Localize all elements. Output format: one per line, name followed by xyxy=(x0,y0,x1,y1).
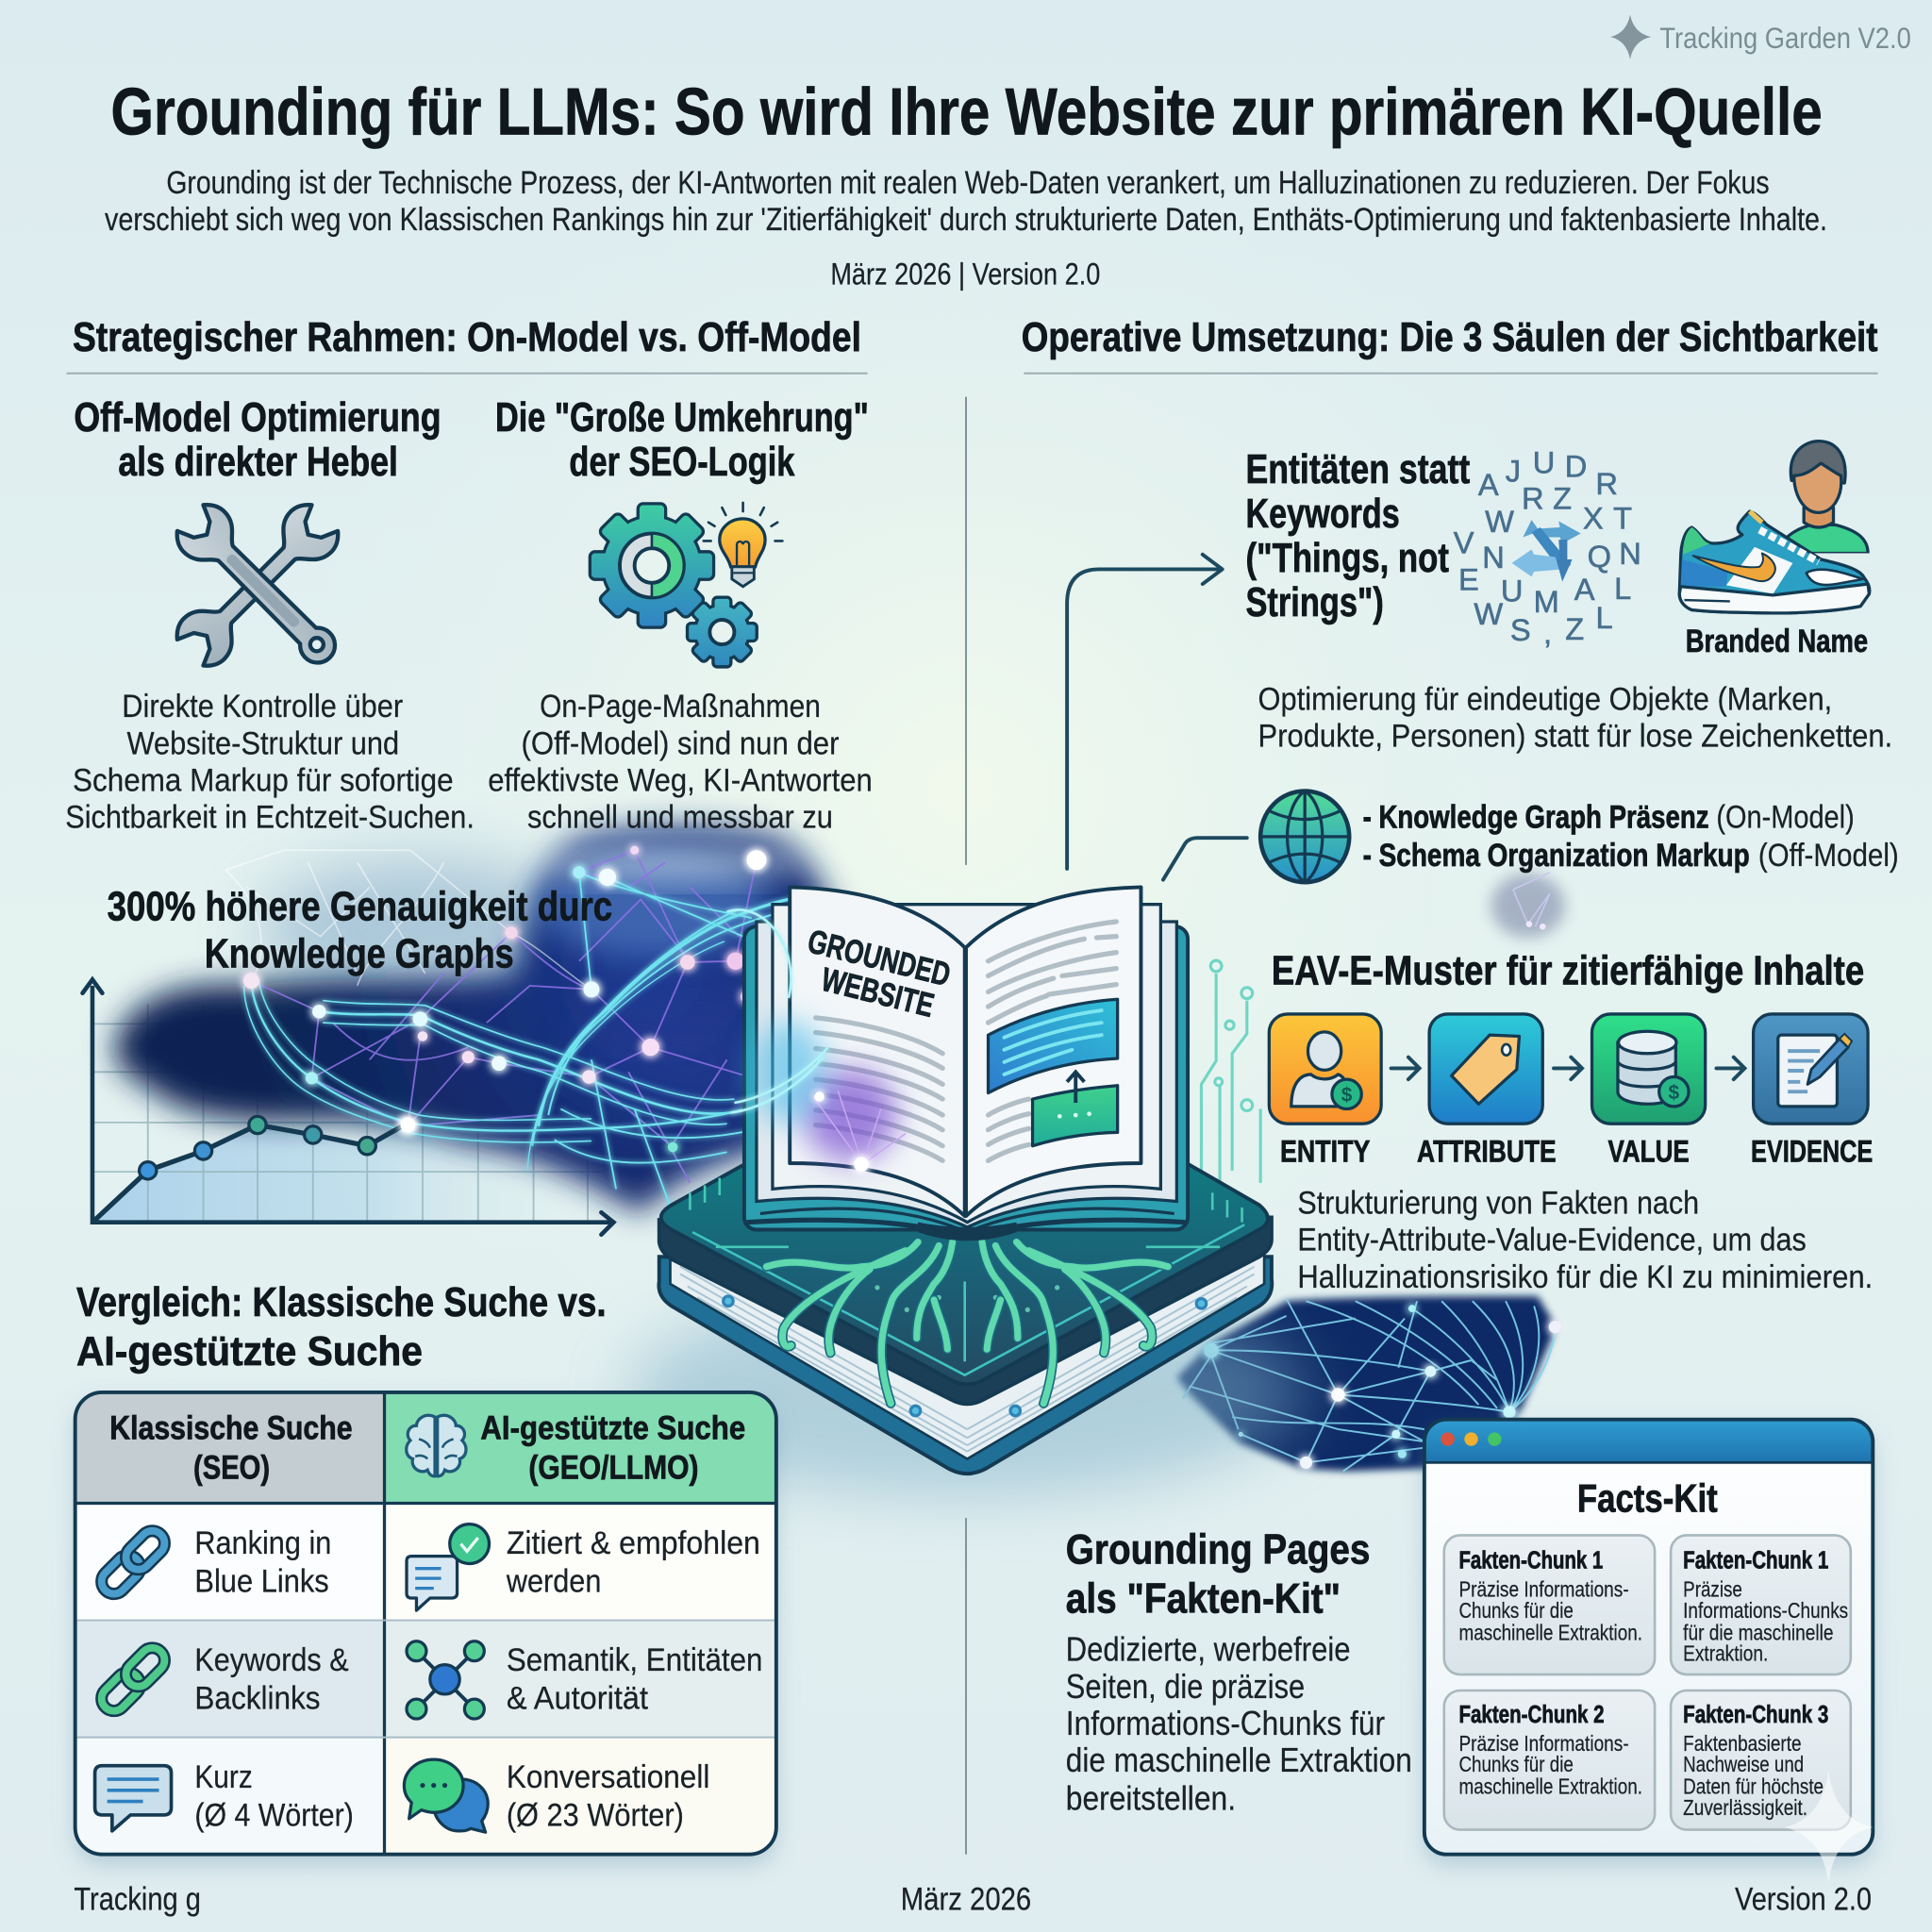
icon: letter cloud with arrows: L xyxy=(1614,571,1631,606)
header: classic search: (SEO) xyxy=(193,1449,270,1486)
footer: März 2026 xyxy=(901,1881,1031,1917)
card: fact chunk 1 variant: Extraktion. xyxy=(1683,1641,1768,1666)
watermark: Tracking Garden xyxy=(1610,15,1911,59)
icon: letter cloud with arrows: X xyxy=(1583,500,1604,535)
icon: letter cloud with arrows: R xyxy=(1522,480,1544,515)
heading: off-model: Off-Model Optimierung xyxy=(74,395,441,441)
panel: grounding pages xyxy=(1066,1526,1412,1818)
heading: 300 percent accuracy: 300% höhere Genauigkeit durc xyxy=(108,885,612,930)
date and version line: März 2026 | Version 2.0 xyxy=(830,257,1100,291)
heading: entities xyxy=(1245,447,1470,625)
arrow xyxy=(1716,1058,1744,1079)
labels: EAV-E steps: EVIDENCE xyxy=(1751,1134,1873,1169)
icon: letter cloud with arrows xyxy=(1454,445,1641,650)
card: fact chunk 1: Chunks für die xyxy=(1458,1598,1574,1623)
icon: person and branded sneaker xyxy=(1679,441,1871,613)
row: semantics: Semantik, Entitäten xyxy=(507,1642,762,1678)
body: direct control: Sichtbarkeit in Echtzeit-Suchen. xyxy=(65,800,475,836)
heading: comparison: AI-gestützte Suche xyxy=(76,1329,423,1374)
book: right page xyxy=(966,887,1141,1216)
icon: message with check xyxy=(407,1524,490,1610)
body: structuring facts xyxy=(1297,1186,1873,1295)
row: cited and recommended xyxy=(506,1525,760,1600)
icon: letter cloud with arrows: W xyxy=(1485,504,1514,539)
footer xyxy=(74,1881,1872,1917)
heading: grounding pages: Grounding Pages xyxy=(1066,1526,1370,1573)
card: fact chunk 3: Daten für höchste xyxy=(1683,1774,1824,1799)
book: right page text lines xyxy=(989,922,1116,1160)
knowledge graph and schema bullets: - Schema Organization Markup xyxy=(1363,838,1750,874)
icon: letter cloud with arrows: R xyxy=(1595,466,1618,501)
body: direct control: Schema Markup für sofortige xyxy=(73,763,454,799)
icon: letter cloud with arrows: N xyxy=(1482,540,1505,575)
circuit traces beside the book xyxy=(1201,960,1260,1183)
card: fact chunk 1 variant: für die maschinelle xyxy=(1683,1620,1834,1644)
body: dedicated pages: bereitstellen. xyxy=(1066,1779,1236,1818)
spine base xyxy=(918,1223,1017,1241)
body: structuring facts: Entity-Attribute-Value-Evidence, um das xyxy=(1297,1223,1807,1258)
icon: letter cloud with arrows: Q xyxy=(1588,539,1611,574)
body: on-page measures: (Off-Model) sind nun der xyxy=(521,725,839,761)
card: fact chunk 2: maschinelle Extraktion. xyxy=(1458,1774,1642,1799)
header: classic search xyxy=(109,1410,353,1486)
arrow xyxy=(1391,1058,1420,1079)
neural network: glowing nodes xyxy=(243,846,769,1152)
row: cited and recommended: werden xyxy=(506,1564,601,1600)
book: blue highlight box xyxy=(989,999,1118,1093)
roots growing into the platform xyxy=(766,1242,1168,1404)
book label: grounded website xyxy=(804,923,954,1024)
body: dedicated pages xyxy=(1066,1630,1412,1818)
icon: letter cloud with arrows: A xyxy=(1478,467,1499,502)
neural network: pale upper strands xyxy=(225,850,591,990)
arrow xyxy=(1554,1058,1582,1079)
tile: evidence xyxy=(1754,1014,1868,1124)
icon: crossed wrenches xyxy=(170,498,350,677)
icon: letter cloud with arrows: T xyxy=(1613,500,1632,535)
card: fact chunk 3: Faktenbasierte xyxy=(1683,1731,1802,1756)
tile: entity xyxy=(1269,1014,1381,1124)
body: unique objects xyxy=(1258,681,1892,755)
sneaker xyxy=(1679,511,1870,613)
body: dedicated pages: Dedizierte, werbefreie xyxy=(1066,1630,1351,1669)
heading: big reversal xyxy=(495,395,869,485)
footer: Tracking g xyxy=(74,1881,201,1917)
icon: letter cloud with arrows: J xyxy=(1506,454,1521,489)
neural network: cyan bundles xyxy=(244,873,813,1214)
tile: value xyxy=(1592,1014,1706,1124)
body: structuring facts: Halluzinationsrisiko für die KI zu minimieren. xyxy=(1297,1259,1873,1295)
comparison table xyxy=(75,1392,776,1855)
heading: off-model: als direkter Hebel xyxy=(118,440,398,485)
platform: lower cover and pages xyxy=(658,1247,1272,1474)
labels: EAV-E steps xyxy=(1280,1134,1873,1169)
icon: entity network xyxy=(407,1641,484,1719)
body: unique objects: Optimierung für eindeutige Objekte (Marken, xyxy=(1258,681,1832,717)
card: fact chunk 1 variant: Fakten-Chunk 1 xyxy=(1683,1548,1828,1574)
window title: Facts-Kit xyxy=(1577,1476,1718,1521)
icon: letter cloud with arrows: L xyxy=(1595,600,1613,635)
tile: entity: $ xyxy=(1341,1085,1353,1107)
icon: gears and light bulb xyxy=(585,499,782,671)
card: fact chunk 2: Chunks für die xyxy=(1458,1752,1574,1776)
line chart base: grid, axes and area xyxy=(83,979,613,1235)
footer: Version 2.0 xyxy=(1735,1881,1872,1917)
body: structuring facts: Strukturierung von Fakten nach xyxy=(1297,1186,1699,1222)
neural network cloud lower right xyxy=(1176,1296,1561,1472)
card: fact chunk 1 xyxy=(1444,1535,1655,1674)
icon: letter cloud with arrows: S xyxy=(1510,612,1531,647)
subtitle text block xyxy=(105,165,1827,238)
knowledge graph and schema bullets: - Knowledge Graph Präsenz xyxy=(1363,800,1709,836)
panel: entities instead of keywords xyxy=(1245,441,1892,755)
card: fact chunk 1: maschinelle Extraktion. xyxy=(1458,1620,1642,1644)
icon: letter cloud with arrows: V xyxy=(1454,525,1474,559)
body: dedicated pages: Informations-Chunks für xyxy=(1066,1704,1385,1742)
connector arrow to entities xyxy=(1067,555,1223,869)
book: green box with up arrow xyxy=(1033,1072,1118,1146)
panel: the big reversal xyxy=(488,395,873,836)
row: ranking xyxy=(194,1525,331,1600)
icon: short message xyxy=(95,1766,172,1831)
heading: entities: Strings") xyxy=(1245,580,1384,625)
header: AI search: (GEO/LLMO) xyxy=(528,1449,699,1486)
icon: letter cloud with arrows: A xyxy=(1574,572,1595,607)
icon: globe xyxy=(1260,791,1349,882)
header: classic search: Klassische Suche xyxy=(109,1410,353,1447)
row: short queries: Kurz xyxy=(194,1759,253,1795)
row: keywords: Backlinks xyxy=(194,1681,321,1717)
heading: strategic frame: Strategischer Rahmen: On-Model vs. Off-Model xyxy=(73,315,861,360)
heading: 300 percent accuracy xyxy=(108,885,612,976)
tile: attribute xyxy=(1429,1014,1542,1124)
row: keywords xyxy=(194,1642,349,1717)
heading: entities: Entitäten statt xyxy=(1245,447,1470,492)
table background cells xyxy=(75,1392,776,1855)
heading: off-model xyxy=(74,395,441,485)
panel: EAV-E pattern xyxy=(1269,949,1873,1295)
body: direct control xyxy=(65,689,475,836)
icon: conversation bubbles xyxy=(404,1759,488,1832)
heading: 300 percent accuracy: Knowledge Graphs xyxy=(205,931,514,976)
heading: big reversal: der SEO-Logik xyxy=(569,440,795,485)
row: conversational xyxy=(507,1759,709,1834)
icon: green chain link xyxy=(96,1642,170,1716)
knowledge graph and schema bullets xyxy=(1363,800,1899,874)
central illustration: grounded website book on platform xyxy=(628,887,1306,1497)
heading: comparison xyxy=(76,1280,607,1374)
platform: top cover xyxy=(659,1140,1272,1404)
body: direct control: Website-Struktur und xyxy=(127,725,399,761)
icon: letter cloud with arrows: W xyxy=(1474,596,1503,631)
neural network: purple connections xyxy=(251,850,761,1183)
body: on-page measures: On-Page-Maßnahmen xyxy=(540,689,821,724)
neural overlay on the book page xyxy=(727,910,906,1172)
heading: entities: Keywords xyxy=(1245,491,1400,537)
row: cited and recommended: Zitiert & empfohlen xyxy=(507,1525,760,1561)
row: conversational: Konversationell xyxy=(507,1759,709,1795)
book: left page xyxy=(790,887,965,1216)
heading: grounding pages xyxy=(1066,1526,1370,1623)
tile: value: $ xyxy=(1669,1082,1680,1104)
body: dedicated pages: Seiten, die präzise xyxy=(1066,1667,1305,1706)
row: semantics: & Autorität xyxy=(507,1681,648,1717)
facts-kit browser window xyxy=(1424,1420,1873,1855)
card: fact chunk 2: Präzise Informations- xyxy=(1458,1731,1629,1756)
heading: comparison: Vergleich: Klassische Suche vs. xyxy=(76,1280,607,1325)
platform shadow xyxy=(628,1288,1306,1497)
body: direct control: Direkte Kontrolle über xyxy=(122,689,403,724)
heading: big reversal: Die "Große Umkehrung" xyxy=(495,395,869,441)
heading: entities: ("Things, not xyxy=(1245,536,1449,581)
row: short queries: (Ø 4 Wörter) xyxy=(194,1798,354,1834)
card: fact chunk 3: Fakten-Chunk 3 xyxy=(1683,1702,1828,1728)
labels: EAV-E steps: VALUE xyxy=(1607,1134,1690,1169)
row: ranking: Blue Links xyxy=(194,1564,329,1600)
card: fact chunk 2 xyxy=(1444,1690,1655,1830)
row: conversational: (Ø 23 Wörter) xyxy=(507,1798,684,1834)
header: AI search: AI-gestützte Suche xyxy=(480,1410,745,1447)
card: fact chunk 3 xyxy=(1671,1690,1851,1830)
row: ranking: Ranking in xyxy=(194,1525,331,1561)
book label: grounded website: GROUNDED xyxy=(804,923,954,993)
card: fact chunk 2: Fakten-Chunk 2 xyxy=(1458,1702,1605,1728)
card: fact chunk 1 variant: Präzise xyxy=(1683,1577,1742,1602)
connector line to knowledge graph xyxy=(1163,838,1247,880)
icon: letter cloud with arrows: N xyxy=(1619,536,1641,571)
header: AI search xyxy=(480,1410,745,1486)
body: on-page measures xyxy=(488,689,873,836)
icon: letter cloud with arrows: Z xyxy=(1553,480,1572,515)
watermark sparkle xyxy=(1784,1771,1873,1883)
card: fact chunk 1 variant: Informations-Chunks xyxy=(1683,1598,1848,1623)
icon: letter cloud with arrows: U xyxy=(1533,445,1555,480)
card: fact chunk 3: Nachweise und xyxy=(1683,1752,1804,1776)
book: left page text lines xyxy=(816,1018,942,1160)
icon: letter cloud with arrows: E xyxy=(1458,562,1479,597)
label: branded name: Branded Name xyxy=(1686,624,1868,659)
icon: blue chain link xyxy=(96,1525,170,1599)
knowledge graph and schema bullets: (On-Model) xyxy=(1716,800,1855,836)
body: dedicated pages: die maschinelle Extraktion xyxy=(1066,1740,1412,1779)
window frame xyxy=(1424,1420,1873,1855)
row: semantics xyxy=(507,1642,762,1717)
icon: letter cloud with arrows: M xyxy=(1534,584,1559,619)
panel: off-model optimisation xyxy=(65,395,475,836)
body: on-page measures: effektivste Weg, KI-Antworten xyxy=(488,763,873,799)
icon: letter cloud with arrows: , xyxy=(1543,615,1552,650)
book label: grounded website: WEBSITE xyxy=(818,961,938,1024)
heading: grounding pages: als "Fakten-Kit" xyxy=(1066,1576,1341,1623)
knowledge graph and schema bullets: (Off-Model) xyxy=(1758,838,1899,874)
faint neural fragment near EAV heading xyxy=(1491,873,1565,938)
icon: letter cloud with arrows: U xyxy=(1501,573,1523,608)
card: fact chunk 3: Zuverlässigkeit. xyxy=(1683,1795,1807,1820)
row: short queries xyxy=(194,1759,354,1834)
chart line and data points xyxy=(92,1116,415,1223)
row: keywords: Keywords & xyxy=(194,1642,349,1678)
icon: letter cloud with arrows: Z xyxy=(1565,611,1584,646)
icon: letter cloud with arrows: D xyxy=(1565,448,1587,483)
card: fact chunk 1 variant xyxy=(1671,1535,1851,1674)
card: fact chunk 1: Fakten-Chunk 1 xyxy=(1458,1548,1603,1574)
labels: EAV-E steps: ENTITY xyxy=(1280,1134,1371,1169)
body: on-page measures: schnell und messbar zu xyxy=(527,800,833,836)
card: fact chunk 1: Präzise Informations- xyxy=(1458,1577,1629,1602)
icon: brain xyxy=(407,1415,466,1476)
book: back cover and page stack xyxy=(744,905,1188,1237)
neural network cloud behind chart and book xyxy=(114,826,862,1214)
labels: EAV-E steps: ATTRIBUTE xyxy=(1417,1134,1557,1169)
